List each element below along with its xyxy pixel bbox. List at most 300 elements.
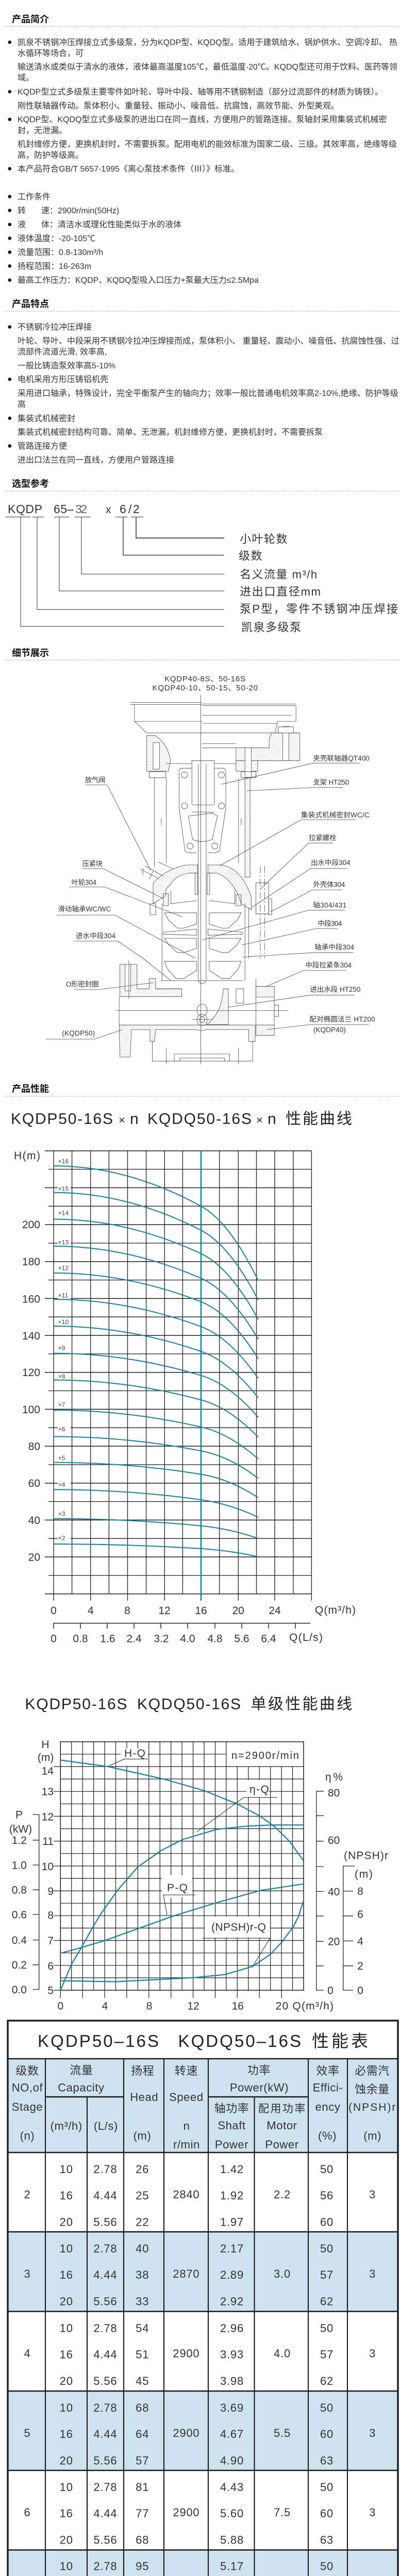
table row: stage 7 (8, 2550, 398, 2576)
table row: stage 2: 2840 (173, 2188, 199, 2201)
part labels: 进水中段304 (76, 932, 116, 940)
table row: stage 4: 4.0 (274, 2347, 291, 2360)
table row: stage 5: 2.78 (93, 2401, 117, 2414)
table row: stage 5: 60 (320, 2428, 334, 2441)
table row: stage 6: 68 (136, 2534, 149, 2546)
Q axis L/s: 2.4 (126, 1633, 142, 1645)
table row: stage 3: 33 (136, 2295, 149, 2308)
table row: stage 3: 16 (60, 2268, 73, 2281)
text block: product intro bullets: 高，防护等级高。 (18, 150, 84, 160)
table row: stage 4: 5.56 (93, 2375, 117, 2387)
title: single-stage performance curve: KQDQ50-16S (137, 1696, 241, 1713)
table row: stage 2: 56 (320, 2189, 334, 2202)
table header: Motor (266, 2119, 297, 2132)
table row: stage 6: 4.43 (220, 2481, 244, 2494)
model code diagram: 32 (75, 502, 87, 516)
part labels: 夹壳联轴器QT400 (313, 755, 370, 762)
NPSH axis: 8 (357, 1886, 363, 1897)
part labels: 中段304 (318, 920, 342, 927)
model code diagram: 名义流量 m³/h (240, 568, 318, 581)
chart: single-stage curves (9, 1739, 388, 2012)
table header: 功率 (247, 2064, 271, 2077)
model code diagram: 65 (54, 502, 67, 516)
H axis labels: 80 (28, 1440, 40, 1453)
table row: stage 5: 5.5 (274, 2427, 291, 2439)
table header: Speed (169, 2091, 204, 2104)
table row: stage 5 (8, 2391, 398, 2470)
H axis labels: H(m) (14, 1150, 40, 1162)
table row: stage 7: 5.17 (220, 2560, 244, 2573)
text block: product features: 采用进口轴承，特殊设计，完全平衡泵产生的轴向力；效率一般比普通电机效率高2-10%,绝缘、防护等级 (18, 389, 398, 398)
chart grid (45, 1151, 311, 1601)
title: multi-stage performance curve: × (119, 1113, 125, 1126)
table header: 蚀余量 (355, 2083, 390, 2096)
model code diagram: 凯泉多级泵 (241, 621, 302, 634)
table row: stage 6: 3 (369, 2506, 376, 2519)
text block: product features: 进出口法兰在同一直线，方便用户管路连接 (18, 455, 174, 465)
Q axis L/s: 6.4 (261, 1633, 276, 1645)
part labels: 轴304/431 (313, 901, 346, 909)
stage labels: ×7 (58, 1401, 65, 1409)
table row: stage 4: 57 (320, 2348, 334, 2361)
model code diagram: 小叶轮数 (240, 533, 288, 546)
table row: stage 2: 26 (136, 2163, 149, 2176)
H axis labels: 120 (22, 1367, 40, 1379)
table row: stage 2: 1.97 (220, 2215, 244, 2229)
table title: KQDQ50–16S (178, 2031, 301, 2050)
stage labels: ×16 (58, 1158, 69, 1165)
H axis labels: 140 (22, 1330, 40, 1342)
H axis labels: 5 (47, 1985, 54, 1997)
table row: stage 4 (24, 2321, 376, 2387)
table header: NO,of (12, 2081, 43, 2094)
table row: stage 5: 3 (369, 2427, 376, 2439)
H axis labels: 14 (42, 1765, 54, 1777)
Q axis labels: 0 (57, 2000, 63, 2012)
table header: 配用功率 (258, 2103, 306, 2115)
Q axis L/s: 3.2 (154, 1633, 169, 1645)
table row: stage 6 (24, 2481, 376, 2546)
eta axis: 20 (328, 1936, 340, 1948)
table row: stage 3: 10 (60, 2242, 73, 2255)
model code diagram: / (128, 502, 132, 516)
stage labels: ×8 (58, 1372, 65, 1380)
stage labels: ×11 (58, 1292, 69, 1299)
stage labels: ×12 (58, 1264, 69, 1272)
Q axis labels (57, 2000, 334, 2012)
table header: 效率 (316, 2064, 340, 2077)
table row: stage 5: 10 (60, 2401, 73, 2414)
table row: stage 4: 2.96 (220, 2321, 244, 2335)
Q axis labels: 20 Q(m³/h) (276, 2000, 334, 2012)
table row: stage 6: 77 (136, 2507, 149, 2520)
part labels: 叶轮304 (72, 879, 97, 886)
text block: product features: 不锈钢冷拉冲压焊接 (18, 323, 92, 332)
H axis labels: H (41, 1739, 49, 1751)
part labels: 放气阀 (85, 776, 105, 784)
H axis labels: 200 (22, 1219, 40, 1231)
table row: stage 2: 2.78 (93, 2163, 117, 2176)
text block: product intro bullets: 输送清水或类似于清水的液体，液体最高温度105℃，最低温度-20℃。KQDQ型还可用于饮料、医药等领 (18, 62, 397, 72)
H axis labels: 12 (42, 1811, 54, 1823)
eta axis: 40 (328, 1886, 340, 1898)
Q axis m3/h: Q(m³/h) (315, 1604, 356, 1616)
model code diagram: x (106, 504, 111, 516)
table row: stage 6: 5.56 (93, 2534, 117, 2546)
table header: Head (130, 2091, 158, 2104)
table row: stage 2: 25 (136, 2189, 149, 2202)
Q axis m3/h: 24 (269, 1605, 281, 1617)
table row: stage 5: 50 (320, 2401, 334, 2414)
table header: r/min (173, 2138, 200, 2151)
table header: 级数 (15, 2064, 39, 2077)
text block: product intro bullets (8, 38, 397, 174)
table row: stage 2: 50 (320, 2163, 334, 2176)
curve labels and leaders (108, 1748, 299, 1967)
H axis labels: 7 (47, 1935, 54, 1947)
table row: stage 3 (8, 2232, 398, 2311)
table row: stage 4: 50 (320, 2321, 334, 2335)
table row: stage 6: 7.5 (274, 2506, 291, 2519)
H axis labels: 11 (42, 1836, 54, 1848)
part labels: (KQDP50) (62, 1029, 95, 1037)
table row: stage 3: 2.78 (93, 2242, 117, 2255)
table row: stage 5: 68 (136, 2401, 149, 2414)
table header (8, 2059, 398, 2153)
table header: (NPSH)r (348, 2102, 396, 2113)
P axis: 0.6 (12, 1909, 27, 1921)
table row: stage 3: 20 (60, 2295, 73, 2308)
text block: product features: 高 (18, 400, 26, 409)
table header: 轴功率 (214, 2102, 249, 2115)
H axis labels: 60 (28, 1478, 40, 1489)
Q axis L/s: 0.8 (73, 1633, 88, 1645)
text block: working conditions: 体：清洁水或理化性能类似于水的液体 (41, 220, 181, 229)
table row: stage 4: 54 (136, 2321, 149, 2335)
NPSH axis: 4 (357, 1936, 363, 1947)
eta axis: 0 (327, 1985, 334, 1997)
stage labels: ×6 (58, 1426, 65, 1433)
H axis labels: 10 (42, 1861, 54, 1873)
part labels: 外壳体304 (313, 881, 345, 888)
part labels: 集装式机械密封WC/C (301, 811, 370, 819)
stage labels: ×13 (58, 1239, 69, 1246)
table row: stage 4: 62 (320, 2375, 334, 2387)
text block: product intro bullets: 水循环等场合，可 (18, 48, 84, 58)
part labels: 中段拉紧条304 (305, 961, 352, 969)
eta axis: 80 (328, 1787, 340, 1799)
text block: product intro bullets: 本产品符合GB/T 5657-1995《离心泵技术条件（Ⅲ）》标准。 (18, 164, 239, 174)
P axis: 0.2 (12, 1959, 27, 1971)
eta axis: 60 (328, 1835, 340, 1846)
text block: product intro bullets: 机封维修方便，更换机封时，不需要拆泵。配用电机的能效标准为国家二级、三级。其效率高，绝缘等级 (18, 140, 397, 149)
table row: stage 5: 57 (136, 2454, 149, 2467)
table row: stage 2: 22 (136, 2215, 149, 2229)
stage labels: ×5 (58, 1454, 65, 1462)
curve: H-Q (60, 1760, 304, 1861)
Q axis m3/h: 0 (51, 1605, 57, 1617)
Q axis L/s (51, 1623, 323, 1645)
text block: working conditions: 工作条件 (18, 192, 51, 201)
chart grid (54, 1742, 304, 1998)
text block: product intro bullets: 域。 (18, 73, 34, 82)
table row: stage 7: 10 (60, 2560, 73, 2573)
table row: stage 6: 60 (320, 2507, 334, 2520)
table row: stage 3: 3.0 (274, 2267, 291, 2280)
text block: working conditions: 液 (18, 220, 26, 229)
model code diagram: 6 (120, 502, 126, 516)
part labels: 支架 HT250 (313, 778, 349, 786)
table row: stage 5: 4.44 (93, 2428, 117, 2441)
table row: stage 4: 2.78 (93, 2321, 117, 2335)
model caption: KQDP40-8S、50-16S (164, 675, 245, 683)
table: performance table (8, 2021, 398, 2576)
P axis: 0.0 (12, 1984, 27, 1996)
Q axis L/s: 5.6 (234, 1633, 249, 1645)
stage labels (58, 1158, 69, 1541)
table row: stage 6: 5.60 (220, 2507, 244, 2520)
NPSH axis (343, 1850, 388, 1997)
table header: (%) (318, 2129, 337, 2142)
table row: stage 4: 4 (24, 2347, 31, 2360)
table row: stage 4: 3 (369, 2347, 376, 2360)
table row: stage 4: 16 (60, 2348, 73, 2361)
H axis labels: 20 (28, 1551, 40, 1563)
text block: working conditions: 流量范围：0.8-130m³/h (18, 248, 103, 257)
P axis: 1.2 (12, 1835, 27, 1846)
model caption: KQDP40-10、50-15、50-20 (153, 684, 258, 692)
title: single-stage performance curve: 单级性能曲线 (251, 1696, 352, 1713)
Q axis L/s: 1.6 (100, 1633, 115, 1645)
H axis labels (14, 1150, 40, 1563)
text block: product features (8, 323, 399, 465)
table row: stage 6: 50 (320, 2481, 334, 2494)
table header: Power (215, 2138, 248, 2151)
table row: stage 2: 20 (60, 2215, 73, 2229)
title: multi-stage performance curve: 性能曲线 (286, 1110, 352, 1127)
table row: stage 4: 10 (60, 2321, 73, 2335)
H axis labels: 100 (22, 1404, 40, 1416)
text block: working conditions: 速：2900r/min(50Hz) (41, 206, 119, 215)
text block: product intro bullets: 刚性联轴器传动。泵体积小、重量轻、振动小、噪音低、抗腐蚀，高效节能、外型美观。 (18, 101, 339, 110)
table row: stage 5: 5.56 (93, 2454, 117, 2467)
table row: stage 5: 20 (60, 2454, 73, 2467)
table row: stage 3: 2.17 (220, 2242, 244, 2255)
text block: product intro bullets: 凯泉不锈钢冲压焊接立式多级泵，分为KQDP型、KQDQ型。适用于建筑给水、锅炉供水、空调冷却、 热 (18, 38, 397, 47)
table title (38, 2031, 368, 2050)
table row: stage 7: 95 (136, 2560, 149, 2573)
H axis labels: (m) (38, 1752, 54, 1764)
curve: NPSH-Q (60, 1901, 304, 1981)
table row: stage 4: 2900 (173, 2347, 199, 2360)
table header: ency (315, 2100, 340, 2113)
part labels: 滑动轴承WC/WC (58, 905, 111, 913)
title: multi-stage performance curve (11, 1110, 352, 1127)
Q axis m3/h: 12 (158, 1605, 171, 1617)
chart: H-Q curves for stages 2 to 16 (14, 1150, 356, 1645)
table row: stage 5: 64 (136, 2428, 149, 2441)
curve labels and leaders: H-Q (124, 1748, 145, 1759)
table header: Power (265, 2138, 299, 2151)
curve: P-Q (60, 1884, 304, 1953)
table header: 流量 (70, 2064, 93, 2077)
table row: stage 3: 38 (136, 2268, 149, 2281)
Q axis m3/h: 8 (124, 1605, 130, 1617)
model code diagram: 泵P型，零件不锈钢冲压焊接 (240, 603, 398, 615)
model code diagram: KQDP (8, 502, 42, 516)
table header: (L/s) (94, 2120, 118, 2132)
part labels: 出水中段304 (311, 859, 351, 867)
stage labels: ×2 (58, 1534, 65, 1541)
heading: product performance: 产品性能 (12, 1084, 49, 1094)
Q axis m3/h: 4 (88, 1605, 94, 1617)
table header: 扬程 (131, 2064, 154, 2077)
title: multi-stage performance curve: KQDQ50-16S (147, 1110, 252, 1127)
table row: stage 2: 1.92 (220, 2189, 244, 2202)
performance curves (54, 1166, 258, 1557)
stage labels: ×3 (58, 1511, 65, 1518)
part labels: O形密封圈 (66, 980, 99, 988)
table header: Effici- (313, 2081, 343, 2094)
NPSH axis: (NPSH)r (344, 1850, 388, 1862)
text block: product features: 集装式机械密封 (18, 414, 75, 423)
heading: product intro: 产品简介 (12, 13, 49, 24)
text block: working conditions: 扬程范围：16-263m (18, 262, 91, 271)
model code diagram: 2 (133, 502, 140, 516)
table row: stage 4: 3.98 (220, 2375, 244, 2387)
H axis labels: 9 (47, 1886, 54, 1897)
table row: stage 3: 62 (320, 2295, 334, 2308)
Q axis m3/h: 16 (195, 1605, 207, 1617)
pump drawing: upper part (57, 695, 360, 958)
part labels: (KQDP40) (313, 1026, 346, 1033)
part labels: 压紧块 (82, 860, 103, 868)
table row: stage 6: 20 (60, 2534, 73, 2546)
title: multi-stage performance curve: × (256, 1113, 263, 1126)
table header: (m) (363, 2129, 381, 2142)
text block: product intro bullets: 封，无泄漏。 (18, 126, 67, 135)
Q axis L/s: 4.0 (180, 1633, 195, 1645)
table row: stage 5: 16 (60, 2428, 73, 2441)
model code diagram (6, 502, 398, 634)
part labels: 配对椭圆法兰 HT200 (309, 1015, 375, 1023)
title: single-stage performance curve: KQDP50-16S (25, 1696, 127, 1713)
H axis labels (38, 1739, 54, 1997)
text block: product features: 管路连接方便 (18, 442, 67, 451)
title: multi-stage performance curve: n (130, 1110, 139, 1127)
table row: stage 3: 2.89 (220, 2268, 244, 2281)
table row: stage 2: 2 (24, 2188, 31, 2201)
table row: stage 6: 6 (24, 2506, 31, 2519)
text block: product features: 叶轮、导叶、中段采用不锈钢冷拉冲压焊接而成，泵体积小、 重量轻、震动小、噪音低、抗腐蚀性强、过 (18, 336, 399, 346)
table title: KQDP50–16S (38, 2031, 159, 2050)
part labels: 拉紧螺栓 (309, 834, 337, 842)
heading: product features: 产品特点 (12, 299, 49, 309)
P axis: 1.0 (12, 1860, 27, 1871)
eta axis (316, 1771, 343, 1997)
table row: stage 6: 16 (60, 2507, 73, 2520)
table row: stage 2: 10 (60, 2163, 73, 2176)
table header: (m) (134, 2129, 151, 2142)
table row: stage 3: 40 (136, 2242, 149, 2255)
stage labels: ×15 (58, 1185, 69, 1193)
table row: stage 3: 5.56 (93, 2295, 117, 2308)
text block: working conditions: 转 (18, 206, 26, 215)
Q axis m3/h: 20 (232, 1605, 244, 1617)
curve labels and leaders: (NPSH)r-Q (211, 1921, 266, 1933)
table title: 性能表 (312, 2031, 368, 2050)
NPSH axis: (m) (355, 1868, 373, 1880)
table header: (m³/h) (51, 2120, 82, 2132)
P axis (9, 1809, 39, 1996)
Q axis labels: 12 (187, 2000, 199, 2012)
table row: stage 4: 3.93 (220, 2348, 244, 2361)
table row: stage 3: 4.44 (93, 2268, 117, 2281)
table row: stage 5: 2900 (173, 2427, 199, 2439)
P axis: (kW) (9, 1823, 32, 1835)
text block: product features: 集装式机械密封结构可靠、简单、无泄漏，机封维修方便，更换机封时，不需要拆泵 (18, 428, 323, 437)
table row: stage 6: 5.88 (220, 2534, 244, 2546)
text block: product intro bullets: KQDP型立式多级泵主要零件如叶轮、导叶中段、轴等用不锈钢制造（部分过流部件的材质为铸铁）。 (18, 87, 383, 96)
table header: Capacity (58, 2081, 105, 2094)
table row: stage 6: 2900 (173, 2506, 199, 2519)
stage labels: ×4 (58, 1481, 65, 1488)
table header: Stage (12, 2100, 43, 2113)
table row: stage 4: 4.44 (93, 2348, 117, 2361)
text block: product intro bullets: KQDP型、KQDQ型立式多级泵的进出口在同一直线，方便用户的管路连接。泵轴封采用集装式机械密 (18, 115, 387, 124)
table row: stage 5: 4.67 (220, 2428, 244, 2441)
H axis labels: 8 (47, 1909, 54, 1921)
curve labels and leaders: η-Q (249, 1784, 269, 1795)
white label backgrounds (58, 1184, 71, 1541)
part labels: 轴承中段304 (314, 943, 354, 951)
table row: stage 6: 4.44 (93, 2507, 117, 2520)
table grid (8, 2021, 398, 2576)
H axis labels: 13 (42, 1786, 54, 1798)
stage labels: ×14 (58, 1209, 69, 1216)
Q axis labels: 16 (232, 2000, 244, 2012)
title: single-stage performance curve (25, 1696, 352, 1713)
table row: stage 3: 50 (320, 2242, 334, 2255)
Q axis L/s: Q(L/s) (289, 1632, 323, 1643)
H axis labels: 40 (28, 1515, 40, 1527)
table row: stage 4: 45 (136, 2375, 149, 2387)
text block: working conditions (8, 192, 259, 285)
model caption (153, 675, 258, 692)
model code diagram: 进出口直径mm (240, 585, 321, 598)
table row: stage 3: 2870 (173, 2267, 199, 2280)
table row: stage 7: 50 (320, 2560, 334, 2573)
table row: stage 6: 10 (60, 2481, 73, 2494)
text block: product features: 电机采用方形压铸铝机壳 (18, 375, 108, 384)
table row: stage 5: 4.90 (220, 2454, 244, 2467)
heading: selection reference: 选型参考 (12, 478, 49, 489)
table row: stage 2: 5.56 (93, 2215, 117, 2229)
pump cross-section diagram (46, 675, 375, 1064)
table row: stage 3: 3 (369, 2267, 376, 2280)
table header: Shaft (218, 2119, 246, 2132)
table header: Power(kW) (230, 2081, 289, 2094)
table row: stage 5: 3.69 (220, 2401, 244, 2414)
text block: product features: 流部件流道光滑, 效率高, (18, 347, 107, 357)
table header: n (184, 2120, 190, 2132)
table row: stage 2: 2.2 (274, 2188, 291, 2201)
H axis labels: 180 (22, 1256, 40, 1268)
H axis labels: 6 (47, 1960, 54, 1972)
table row: stage 6: 81 (136, 2481, 149, 2494)
text block: working conditions: 最高工作压力：KQDP、KQDQ型吸入口压力+泵最大压力≤2.5Mpa (18, 276, 259, 285)
table header: 必需汽 (355, 2064, 390, 2077)
